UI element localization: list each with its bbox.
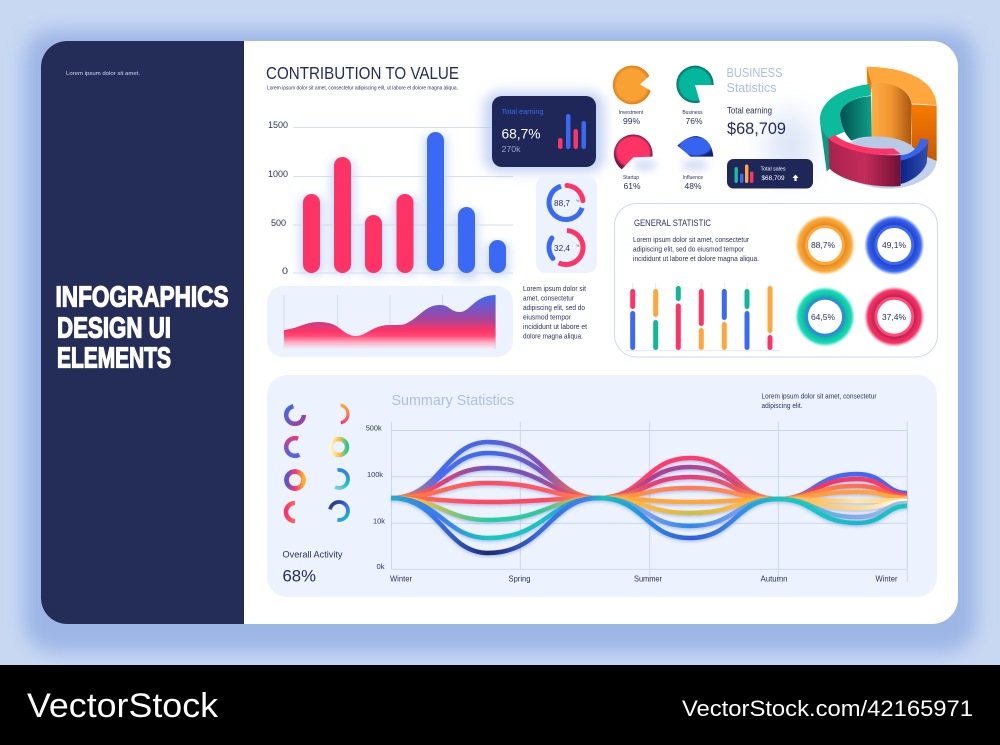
- text block: area chart note: dolore magna aliqua.: [523, 334, 583, 340]
- ring: teal: [795, 287, 855, 347]
- bar chart: 0: [282, 266, 288, 276]
- pie: startup: 61%: [623, 181, 641, 191]
- pie: investment: 99%: [623, 116, 640, 126]
- heading: contribution to value: CONTRIBUTION TO VALUE: [266, 63, 459, 83]
- pie: influence: 48%: [684, 181, 702, 191]
- heading: contribution to value: [266, 63, 459, 92]
- pie: influence: Influence: [683, 175, 703, 181]
- main title: INFOGRAPHICS: [56, 282, 228, 314]
- panel text: Lorem ipsum dolor sit amet, consectetur: [633, 237, 750, 244]
- ring: blue: [864, 215, 924, 275]
- pie: investment: [613, 66, 651, 126]
- gauge 88,7: [544, 181, 588, 224]
- card: total sales: [727, 159, 813, 188]
- line chart: 0k: [376, 562, 385, 571]
- ring: red: 37,4%: [882, 312, 906, 322]
- pie: startup: Startup: [623, 175, 639, 181]
- card: total earning: 68,7%: [502, 126, 540, 142]
- text block: area chart note: eiusmod tempor: [523, 314, 572, 322]
- text block: area chart note: incididunt ut labore et: [523, 324, 587, 331]
- heading: business statistics: Statistics: [726, 80, 777, 95]
- heading: contribution to value: Lorem ipsum dolor sit amet, consectetur adipiscing elit, ut labore et dolore magna aliqua.: [267, 86, 458, 92]
- main title: DESIGN UI: [57, 312, 171, 344]
- card: total earning: 270k: [502, 144, 521, 154]
- panel: donut gauges: 88,7: [554, 199, 571, 208]
- bar chart: 1500: [268, 120, 288, 130]
- card: total sales: $68,709: [762, 176, 785, 182]
- stacked pill chart: [626, 283, 780, 350]
- card: total sales: Total sales: [760, 166, 786, 172]
- small donut set: [283, 404, 349, 521]
- panel note: Lorem ipsum dolor sit amet, consectetur: [762, 394, 877, 400]
- line chart: Spring: [508, 574, 530, 584]
- gauge 32,4: [542, 224, 590, 271]
- text block: area chart note: [523, 286, 587, 340]
- panel heading: GENERAL STATISTIC: [634, 218, 711, 228]
- heading: business statistics: [726, 65, 786, 138]
- line chart: Summer: [634, 574, 662, 584]
- 3D ring chart: [766, 67, 937, 189]
- mini bars: [734, 164, 753, 183]
- line chart: 500k: [366, 424, 382, 432]
- ring: orange: [795, 215, 855, 275]
- line chart: [366, 422, 907, 584]
- line chart: 100k: [367, 470, 383, 479]
- panel: summary statistics: [267, 375, 937, 597]
- text block: area chart note: adipiscing elit, sed do: [523, 305, 585, 312]
- card: total earning: Total earning: [502, 107, 544, 116]
- heading: business statistics: BUSINESS: [726, 65, 783, 80]
- panel text: incididunt ut labore et dolore magna aliqua.: [633, 256, 759, 263]
- left navy sidebar: [41, 41, 244, 624]
- main title: [56, 282, 228, 374]
- pie: startup: [614, 134, 657, 191]
- pie: influence: [677, 136, 713, 191]
- ring: orange: 88,7%: [811, 240, 835, 250]
- ring: red: [864, 287, 924, 347]
- line chart: Winter: [390, 574, 412, 584]
- main white card: [41, 41, 958, 624]
- footer: watermark band: [0, 665, 1000, 745]
- bar chart: 500: [271, 218, 286, 228]
- line chart: Winter: [876, 574, 898, 584]
- ring: blue: 49,1%: [882, 240, 906, 250]
- pie: business: [676, 66, 714, 126]
- panel: donut gauges: %: [576, 198, 580, 203]
- panel: donut gauges: [536, 176, 597, 273]
- pie: business: Business: [682, 110, 703, 116]
- icon: up arrow: [792, 174, 798, 181]
- panel text: [633, 237, 759, 263]
- heading: business statistics: Total earning: [727, 106, 772, 116]
- heading: business statistics: $68,709: [727, 119, 786, 138]
- mini bars: [558, 114, 586, 149]
- panel: general statistic: [614, 204, 938, 357]
- bar chart: [268, 120, 513, 279]
- panel: donut gauges: 32,4: [554, 244, 571, 253]
- panel text: adipiscing elit, sed do eiusmod tempor: [633, 246, 745, 254]
- overall activity: 68%: [282, 566, 316, 586]
- sidebar caption: Lorem ipsum dolor sit amet.: [66, 71, 140, 77]
- overall activity: Overall Activity: [282, 550, 343, 560]
- ring: teal: 64,5%: [811, 312, 835, 322]
- panel note: adipiscing elit.: [762, 403, 803, 410]
- panel: area chart: [267, 286, 513, 357]
- panel note: [762, 394, 877, 410]
- panel: donut gauges: %: [576, 243, 580, 248]
- overall activity: [282, 550, 343, 586]
- main title: ELEMENTS: [57, 342, 171, 374]
- panel heading: Summary Statistics: [392, 392, 514, 409]
- card: total earning: [484, 92, 604, 172]
- text block: area chart note: amet, consectetur: [523, 296, 575, 302]
- line chart: Autumn: [760, 574, 788, 584]
- pie: business: 76%: [685, 116, 703, 126]
- footer logo: VectorStock: [27, 687, 219, 725]
- text block: area chart note: Lorem ipsum dolor sit: [523, 286, 586, 293]
- bar chart: 1000: [268, 169, 288, 179]
- pie: investment: Investment: [619, 110, 644, 116]
- pie icons with labels: [613, 66, 714, 191]
- line chart: 10k: [373, 516, 385, 526]
- footer url: VectorStock.com/42165971: [682, 696, 973, 721]
